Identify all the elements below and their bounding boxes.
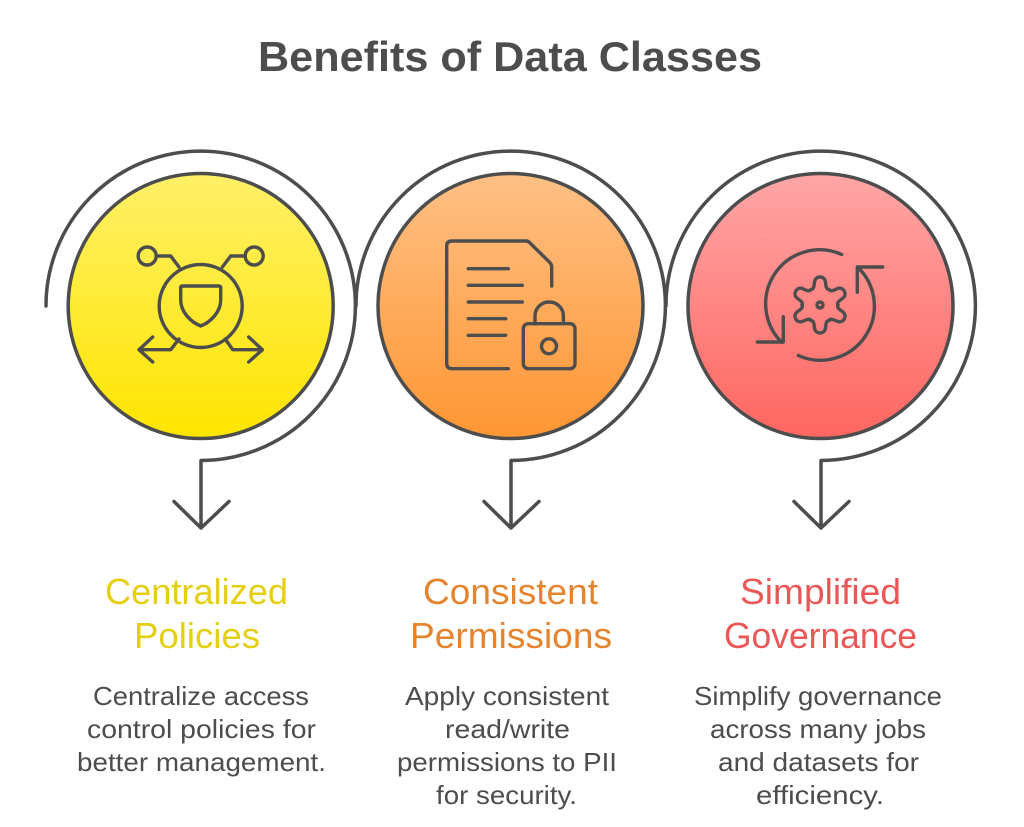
title: Benefits of Data Classes — [258, 33, 762, 80]
panel: simplified governance — [666, 151, 975, 810]
panel: centralized policies — [46, 151, 355, 777]
spiral arrow 1 — [46, 151, 355, 528]
icon: document with padlock — [447, 241, 575, 369]
description: simplified governance: and datasets for — [718, 747, 919, 777]
heading: centralized policies: Centralized — [105, 571, 288, 612]
description: centralized policies: control policies for — [87, 714, 316, 744]
heading: consistent permissions — [410, 571, 612, 656]
heading: consistent permissions: Consistent — [423, 571, 598, 612]
heading: centralized policies: Policies — [134, 615, 260, 656]
heading: simplified governance: Simplified — [740, 571, 901, 612]
description: centralized policies — [77, 681, 326, 777]
icon: gear with cycle arrows — [757, 250, 883, 360]
description: consistent permissions: for security. — [436, 780, 577, 810]
heading: centralized policies — [105, 571, 288, 656]
description: centralized policies: Centralize access — [93, 681, 309, 711]
description: consistent permissions: permissions to PII — [397, 747, 617, 777]
orange circle — [378, 174, 643, 438]
description: consistent permissions: Apply consistent — [405, 681, 610, 711]
heading: simplified governance: Governance — [724, 615, 917, 656]
description: simplified governance: Simplify governance — [694, 681, 942, 711]
spiral arrow 3 — [666, 151, 975, 528]
description: simplified governance — [694, 681, 942, 810]
description: consistent permissions: read/write — [445, 714, 570, 744]
spiral arrow 2 — [356, 151, 665, 528]
heading: consistent permissions: Permissions — [410, 615, 612, 656]
description: centralized policies: better management. — [77, 747, 326, 777]
heading: simplified governance — [724, 571, 917, 656]
icon: shield with network nodes and arrows — [138, 247, 263, 362]
yellow circle — [68, 174, 333, 438]
description: consistent permissions — [397, 681, 617, 810]
panel: consistent permissions — [356, 151, 665, 810]
red circle — [688, 174, 953, 438]
description: simplified governance: across many jobs — [710, 714, 926, 744]
description: simplified governance: efficiency. — [756, 780, 884, 810]
